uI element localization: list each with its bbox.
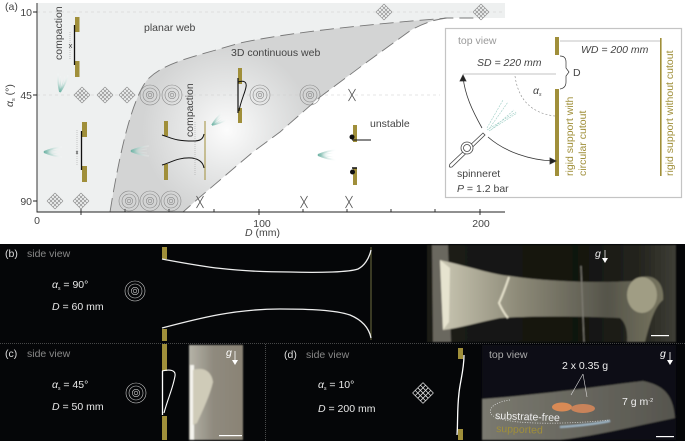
side sketch — [162, 247, 371, 341]
params: D = 60 mm — [52, 301, 104, 313]
areal density: -2 — [648, 398, 653, 404]
mass label — [562, 360, 608, 397]
web sketch: unstable — [350, 125, 371, 185]
substrate free label: substrate-free — [495, 410, 560, 424]
label: pressure: P = 1.2 bar — [457, 183, 509, 195]
x axis ticks: 100 — [253, 218, 271, 230]
label: compaction middle: compaction — [184, 83, 196, 137]
label: unstable: unstable — [370, 118, 410, 130]
label b: (b) — [5, 248, 18, 260]
rigid support with cutout — [555, 37, 559, 176]
3D continuous web region — [110, 18, 447, 212]
params: = 90° — [60, 279, 88, 291]
g arrow — [595, 248, 608, 263]
y axis ticks: 90 — [20, 196, 32, 208]
photo — [482, 345, 676, 440]
side sketch — [162, 344, 175, 440]
ring markers — [119, 85, 320, 211]
params: s — [58, 286, 61, 292]
panel label a: (a) — [5, 1, 18, 13]
y axis title: (°) — [4, 84, 16, 98]
x axis ticks: 200 — [472, 218, 490, 230]
mass label: 2 x 0.35 g — [562, 360, 608, 372]
params: s — [58, 386, 61, 392]
label: top view: top view — [458, 35, 497, 47]
params: α — [52, 279, 59, 291]
label: D brace: D — [573, 67, 581, 79]
web sketch: top left — [69, 17, 80, 77]
supported label: supported — [496, 423, 543, 437]
params: s — [324, 386, 327, 392]
jets — [44, 73, 336, 160]
label d: (d) — [284, 349, 297, 361]
y axis ticks: 10 — [20, 7, 32, 19]
jet lines — [487, 100, 517, 131]
ring marker — [126, 383, 146, 403]
spinneret icon — [449, 133, 485, 167]
label: planar web: planar web — [144, 22, 196, 34]
label: rigid support with circular cutout: circular cutout — [577, 111, 589, 176]
params — [52, 279, 104, 313]
panel: (a) phase diagram — [4, 1, 682, 239]
mesh marker — [413, 383, 433, 403]
panel: (c) — [0, 344, 266, 441]
x axis title: D (mm) — [245, 227, 280, 239]
axes — [33, 3, 505, 215]
panel: (d) — [265, 344, 685, 441]
planar web region — [37, 3, 505, 212]
params: D = 200 mm — [318, 403, 376, 415]
areal density: 7 g m — [622, 396, 648, 408]
label: 3D continuous web: 3D continuous web — [231, 47, 320, 59]
label: alpha s: s — [539, 92, 542, 98]
params: α — [52, 379, 59, 391]
label: SD: SD = 220 mm — [477, 57, 542, 69]
params: D = 50 mm — [52, 401, 104, 413]
web sketch: lower left — [76, 122, 87, 182]
params: α — [318, 379, 325, 391]
g arrow: g — [660, 348, 666, 360]
web sketch: 3D compaction — [162, 121, 205, 180]
scale bar — [651, 335, 669, 336]
g arrow — [660, 348, 673, 365]
side sketch — [457, 348, 464, 440]
g arrow: g — [595, 248, 601, 260]
swing arrows — [460, 75, 556, 164]
params: = 45° — [60, 379, 88, 391]
label: rigid support with circular cutout: rigid support with — [564, 96, 576, 176]
label: compaction top: compaction — [53, 6, 65, 60]
label: rigid support without cutout: rigid support without cutout — [664, 50, 676, 176]
label: spinneret: spinneret — [457, 168, 500, 180]
top view label: top view — [489, 349, 528, 361]
y axis ticks: 45 — [20, 90, 32, 102]
label side view: side view — [27, 248, 71, 260]
angle arc — [515, 76, 555, 116]
label: WD: WD = 200 mm — [581, 44, 649, 56]
scale bar — [656, 436, 674, 437]
y axis ticks — [20, 7, 32, 208]
x axis ticks: 0 — [34, 215, 40, 227]
ring marker — [125, 281, 145, 301]
rigid support without cutout — [660, 38, 662, 176]
x axis ticks — [34, 215, 490, 230]
params — [318, 379, 376, 415]
label: alpha s: α — [533, 85, 539, 97]
params — [52, 379, 104, 413]
mesh markers — [47, 4, 489, 209]
panel: top view inset — [446, 28, 682, 198]
g arrow: g — [226, 347, 232, 359]
label c: (c) — [5, 348, 17, 360]
photo — [189, 345, 243, 440]
scale bar — [219, 435, 242, 436]
params: = 10° — [326, 379, 354, 391]
label: D brace — [560, 56, 581, 89]
side view label: side view — [306, 349, 350, 361]
panel: (b) — [0, 244, 685, 344]
y axis title: α — [4, 100, 16, 107]
side view label: side view — [27, 348, 71, 360]
unstable x markers — [196, 89, 356, 208]
photo — [427, 245, 676, 342]
discs — [552, 402, 595, 413]
web sketch: 45 degree — [238, 68, 246, 123]
y axis title: s — [11, 98, 17, 101]
